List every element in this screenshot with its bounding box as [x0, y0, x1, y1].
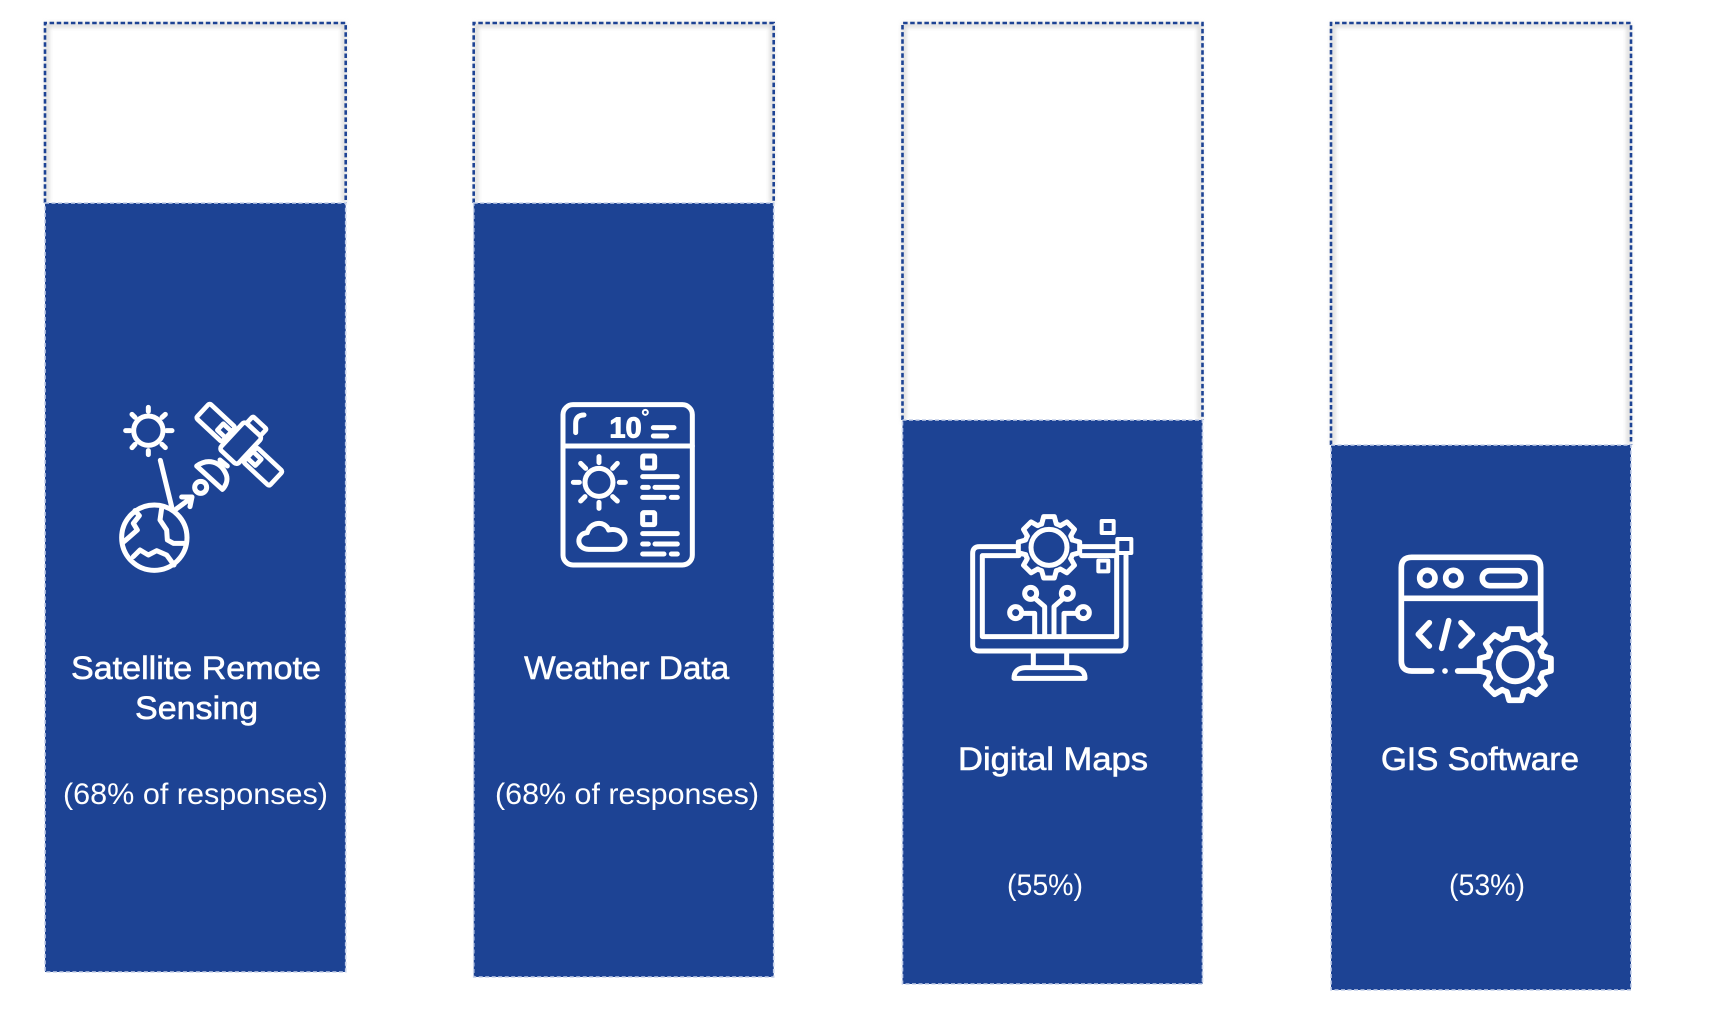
- heading: [71, 650, 321, 726]
- panel: weather data: [474, 23, 774, 977]
- value: (53%): [1449, 869, 1525, 902]
- bar fill 53%: [1331, 445, 1631, 990]
- heading: GIS Software: [1381, 741, 1579, 777]
- heading: Weather Data: [524, 650, 729, 686]
- icon: satellite, sun and earth: [122, 389, 296, 570]
- heading: Digital Maps: [958, 741, 1148, 777]
- bar track: [902, 23, 1202, 420]
- bar fill 55%: [902, 420, 1202, 984]
- bar track: [45, 23, 346, 203]
- icon: weather report: [563, 405, 692, 565]
- value: (55%): [1007, 869, 1083, 902]
- panel: satellite remote sensing: [45, 23, 346, 972]
- panel: digital maps: [902, 23, 1202, 984]
- icon: code window with gear: [1401, 557, 1551, 700]
- panel: gis software: [1331, 23, 1631, 990]
- heading: Satellite Remote: [71, 650, 321, 686]
- value: (68% of responses): [495, 778, 759, 811]
- bar fill 68%: [45, 203, 346, 972]
- icon: weather report: 10: [609, 412, 642, 444]
- bar track: [1331, 23, 1631, 445]
- bar fill 68%: [474, 203, 774, 977]
- bar track: [474, 23, 774, 203]
- heading: Sensing: [135, 690, 258, 726]
- value: (68% of responses): [63, 778, 328, 811]
- icon: monitor with gear: [973, 517, 1131, 678]
